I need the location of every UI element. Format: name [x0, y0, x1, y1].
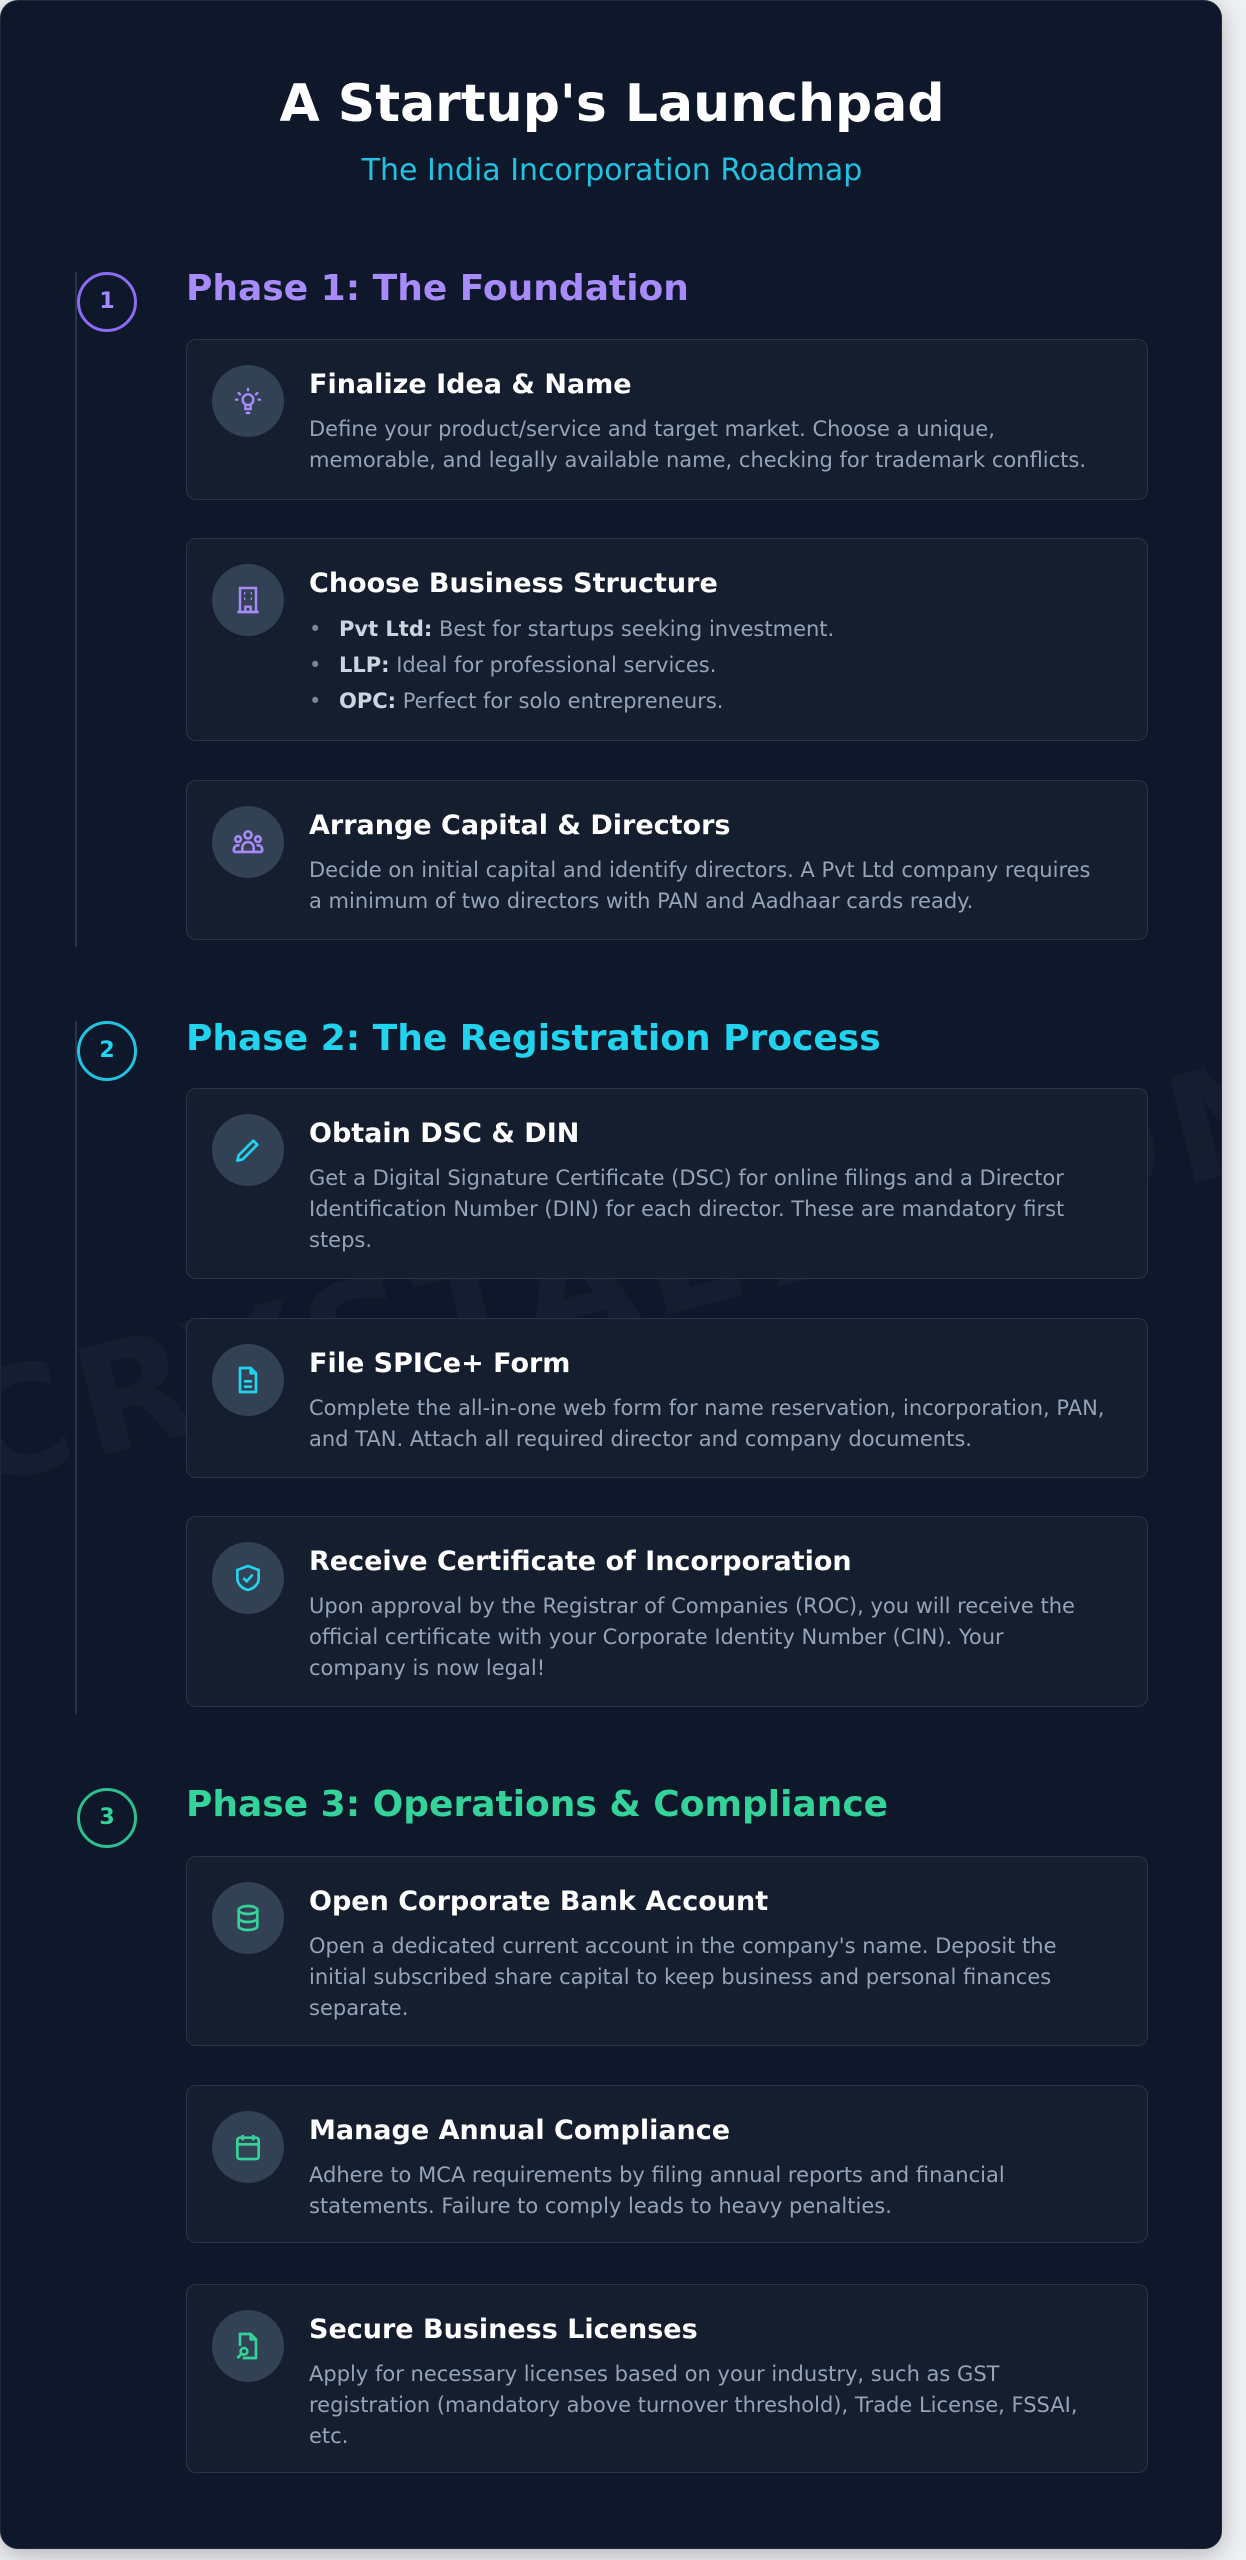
phase 3 heading: Phase 3: Operations & Compliance — [186, 1784, 888, 1825]
card: certificate: Upon approval by the Registrar of Companies (ROC), you will receive the official certificate with your Corporate Identity Number (CIN). Your company is now legal! — [309, 1594, 1075, 1680]
card: finalize idea: Define your product/service and target market. Choose a unique, memorable, and legally available name, checking for trademark conflicts. — [309, 417, 1086, 472]
card: DSC & DIN: Obtain DSC & DIN — [309, 1118, 579, 1149]
title: A Startup's Launchpad — [279, 74, 945, 134]
card: licenses: Secure Business Licenses — [309, 2314, 698, 2345]
card: DSC & DIN — [186, 1088, 1148, 1279]
card: SPICe+ — [186, 1318, 1148, 1478]
card: business structure: Pvt Ltd: Best for startups seeking investment. — [339, 617, 834, 641]
icon: pen — [212, 1114, 284, 1186]
card: business structure — [186, 538, 1148, 741]
icon: calendar — [212, 2111, 284, 2183]
phase 1 heading: Phase 1: The Foundation — [186, 268, 689, 309]
icon: building — [212, 564, 284, 636]
phase 2 number: 2 — [99, 1038, 115, 1063]
card: capital & directors — [186, 780, 1148, 940]
card: certificate — [186, 1516, 1148, 1707]
phase 3 number — [77, 1788, 137, 1848]
icon: file search — [212, 2310, 284, 2382]
card: licenses — [186, 2284, 1148, 2473]
icon: document — [212, 1344, 284, 1416]
phase 2 number — [77, 1021, 137, 1081]
phase 1 number: 1 — [99, 289, 115, 314]
card: certificate: Receive Certificate of Incorporation — [309, 1546, 852, 1577]
card: bank account — [186, 1856, 1148, 2046]
card: finalize idea: Finalize Idea & Name — [309, 369, 632, 400]
icon: database — [212, 1882, 284, 1954]
phase 2 heading: Phase 2: The Registration Process — [186, 1018, 881, 1059]
icon: shield check — [212, 1542, 284, 1614]
card: annual compliance — [186, 2085, 1148, 2243]
card: finalize idea — [186, 339, 1148, 500]
card: SPICe+: File SPICe+ Form — [309, 1348, 570, 1379]
phase 3 number: 3 — [99, 1805, 115, 1830]
card: business structure: LLP: Ideal for professional services. — [339, 653, 716, 677]
card: annual compliance: Manage Annual Compliance — [309, 2115, 730, 2146]
card: business structure: Choose Business Structure — [309, 568, 718, 599]
card: capital & directors: Arrange Capital & Directors — [309, 810, 730, 841]
card: bank account: Open a dedicated current account in the company's name. Deposit the initial subscribed share capital to keep business and personal finances separate. — [309, 1934, 1057, 2020]
card: business structure: OPC: Perfect for solo entrepreneurs. — [339, 689, 723, 713]
card: DSC & DIN: Get a Digital Signature Certificate (DSC) for online filings and a Director Identification Number (DIN) for each director. These are mandatory first steps. — [309, 1166, 1064, 1252]
subtitle: The India Incorporation Roadmap — [362, 153, 862, 188]
card: bank account: Open Corporate Bank Account — [309, 1886, 768, 1917]
phase 1 number — [77, 272, 137, 332]
icon: lightbulb — [212, 365, 284, 437]
card: licenses: Apply for necessary licenses based on your industry, such as GST registration (mandatory above turnover threshold), Trade License, FSSAI, etc. — [309, 2362, 1078, 2448]
card: SPICe+: Complete the all-in-one web form for name reservation, incorporation, PAN, and TAN. Attach all required director and company documents. — [309, 1396, 1104, 1451]
card: capital & directors: Decide on initial capital and identify directors. A Pvt Ltd company requires a minimum of two directors with PAN and Aadhaar cards ready. — [309, 858, 1090, 913]
icon: people — [212, 806, 284, 878]
card: annual compliance: Adhere to MCA requirements by filing annual reports and financial statements. Failure to comply leads to heavy penalties. — [309, 2163, 1005, 2218]
